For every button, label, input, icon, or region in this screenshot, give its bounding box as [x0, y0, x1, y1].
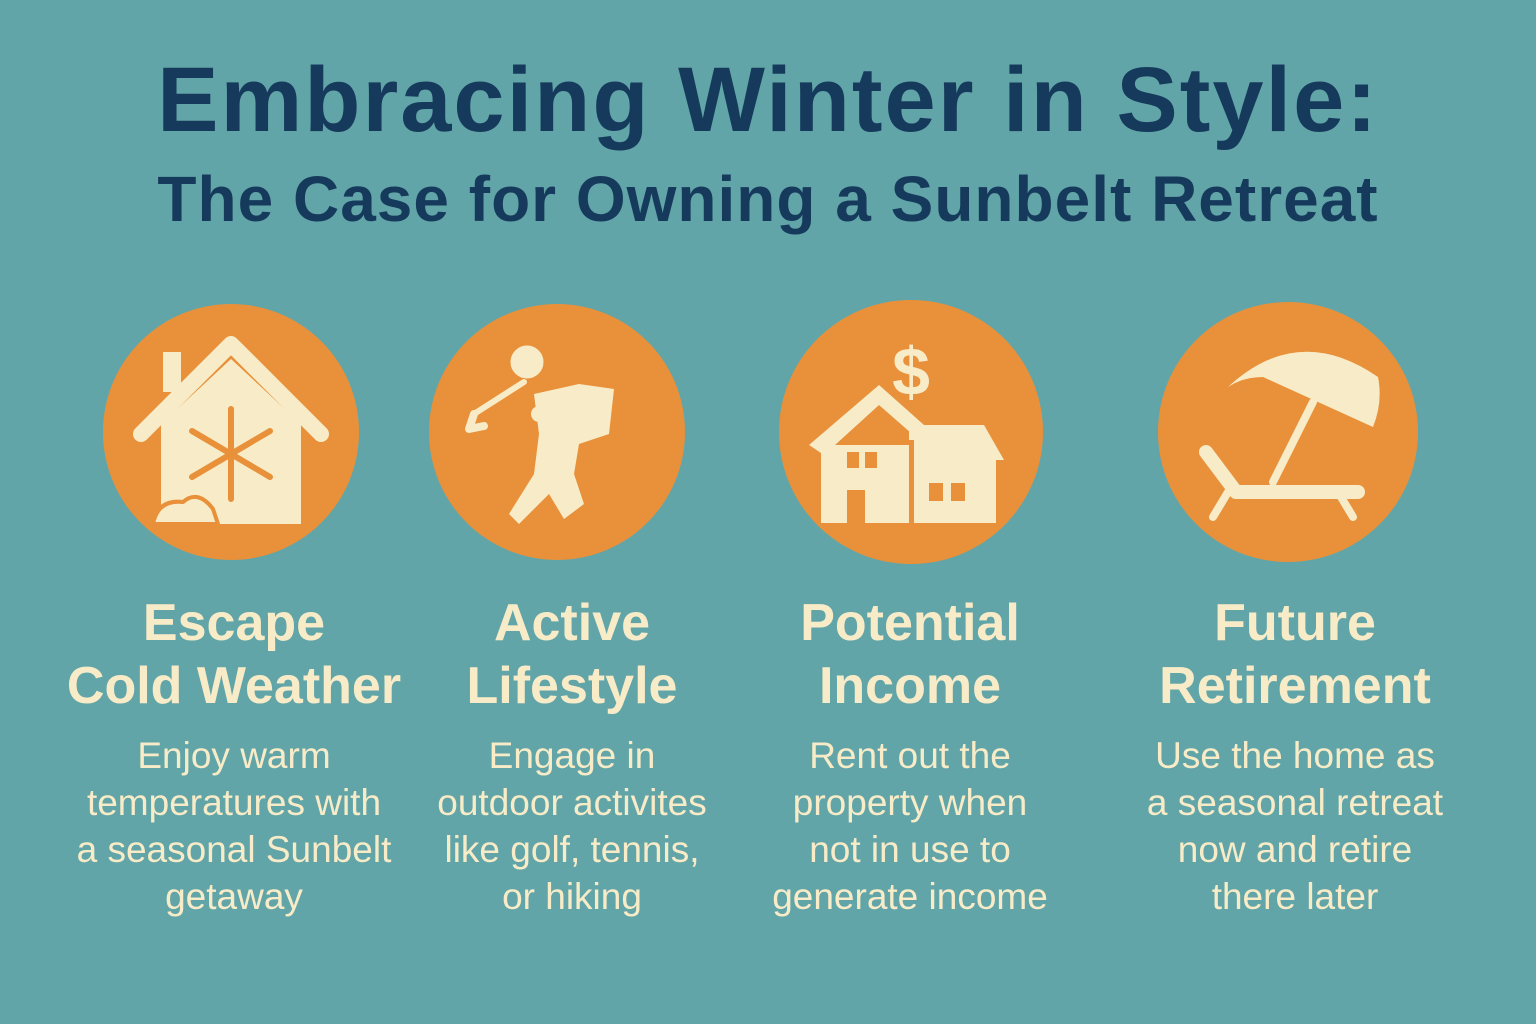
- panel: active lifestyle: Lifestyle: [466, 657, 677, 715]
- panel: active lifestyle: outdoor activites: [437, 782, 707, 823]
- panel: future retirement: a seasonal retreat: [1147, 782, 1443, 823]
- panel: potential income: generate income: [772, 876, 1048, 917]
- panel: escape cold weather: Cold Weather: [67, 657, 401, 715]
- panel: escape cold weather: Escape: [143, 594, 325, 652]
- icon: golfer: [429, 304, 685, 560]
- panel: active lifestyle: Engage in: [489, 735, 655, 776]
- panel: escape cold weather: a seasonal Sunbelt: [77, 829, 391, 870]
- panel: potential income: [772, 594, 1048, 917]
- panel: future retirement: Retirement: [1159, 657, 1431, 715]
- panel: active lifestyle: like golf, tennis,: [444, 829, 700, 870]
- panel: active lifestyle: or hiking: [502, 876, 642, 917]
- subtitle: The Case for Owning a Sunbelt Retreat: [157, 163, 1379, 235]
- panel: escape cold weather: Enjoy warm: [137, 735, 331, 776]
- panel: potential income: not in use to: [809, 829, 1011, 870]
- panel: future retirement: now and retire: [1178, 829, 1412, 870]
- panel: future retirement: [1147, 594, 1443, 917]
- panel: potential income: Potential: [800, 594, 1020, 652]
- panel: potential income: Income: [819, 657, 1001, 715]
- icon: houses with dollar: $: [892, 334, 930, 410]
- icon: house with snowflake: [103, 304, 359, 560]
- title: Embracing Winter in Style:: [157, 49, 1379, 151]
- panel: escape cold weather: getaway: [165, 876, 303, 917]
- panel: escape cold weather: [67, 594, 401, 917]
- icon: beach umbrella and lounger: [1158, 302, 1418, 562]
- panel: future retirement: Use the home as: [1155, 735, 1435, 776]
- panel: future retirement: there later: [1212, 876, 1378, 917]
- panel: active lifestyle: [437, 594, 707, 917]
- icon: houses with dollar: [779, 300, 1043, 564]
- panel: active lifestyle: Active: [494, 594, 650, 652]
- panel: future retirement: Future: [1214, 594, 1376, 652]
- panel: potential income: property when: [793, 782, 1027, 823]
- panel: escape cold weather: temperatures with: [87, 782, 381, 823]
- panel: potential income: Rent out the: [809, 735, 1011, 776]
